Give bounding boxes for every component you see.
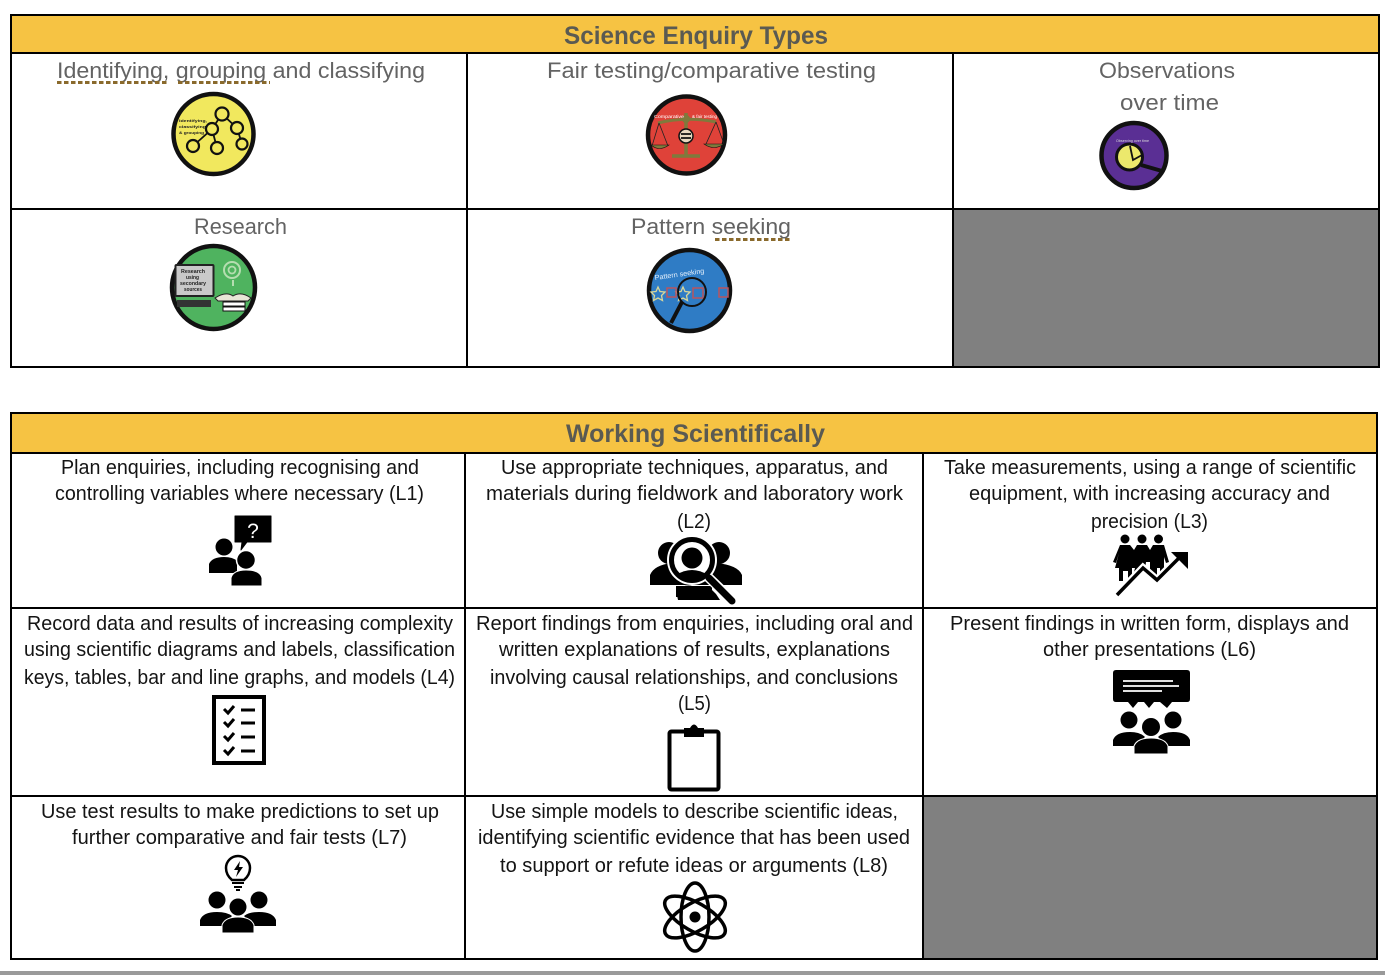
icon: yellow classifying badge: Identifying, [179, 118, 207, 123]
icon: green research badge [172, 246, 255, 329]
heading: Science Enquiry Types: Science Enquiry Types [564, 22, 828, 50]
heading: Working Scientifically: Working Scientifically [566, 420, 825, 448]
panel: Science Enquiry Types [11, 15, 1379, 367]
cell: L1: controlling variables where necessary (L1) [55, 483, 424, 505]
cell: L3 [944, 457, 1356, 595]
icon: red balance scales badge: Comparative [654, 114, 685, 119]
icon: people with question bubble [209, 516, 271, 586]
cell: L3: equipment, with increasing accuracy and [969, 483, 1330, 505]
cell: L1: Plan enquiries, including recognising and [61, 457, 419, 479]
cell: L2: Use appropriate techniques, apparatus, and [501, 457, 888, 479]
icon: yellow classifying badge: classifying [179, 124, 207, 129]
cell: L4: Record data and results of increasing complexity [27, 613, 453, 635]
icon: yellow classifying badge [174, 94, 254, 174]
icon: blue pattern seeking badge: Pattern seeking [654, 268, 705, 282]
icon: atom [659, 883, 731, 951]
cell: L5: written explanations of results, explanations [498, 639, 890, 661]
icon: red balance scales badge [648, 96, 725, 174]
cell: L5: (L5) [678, 693, 711, 715]
cell: Pattern seeking: Pattern seeking [631, 214, 791, 239]
icon: checklist [214, 697, 264, 763]
empty grey cell [953, 209, 1379, 367]
cell: L6 [950, 613, 1349, 754]
cell: Identifying, grouping and classifying [57, 58, 425, 174]
cell: Pattern seeking [631, 214, 792, 331]
cell: L8 [478, 801, 910, 951]
icon: people with rising arrow [1113, 534, 1188, 595]
cell: L2 [486, 457, 904, 601]
icon: yellow classifying badge: & grouping [179, 130, 205, 135]
cell: L6: other presentations (L6) [1043, 639, 1256, 661]
cell: L3: Take measurements, using a range of scientific [944, 457, 1356, 479]
cell: L4 [24, 613, 455, 763]
cell: L3: precision (L3) [1091, 511, 1208, 533]
cell: Observations over time: over time [1120, 90, 1219, 115]
cell: L7: Use test results to make predictions to set up [41, 801, 439, 823]
cell: L8: Use simple models to describe scientific ideas, [491, 801, 898, 823]
panel: Working Scientifically [11, 413, 1377, 959]
heading: Science Enquiry Types [11, 15, 1379, 53]
cell: L7 [41, 801, 439, 933]
heading: Working Scientifically [11, 413, 1377, 453]
cell: L1 [55, 457, 424, 586]
icon: audience with speech bubble [1113, 670, 1190, 754]
cell: L2: materials during fieldwork and laboratory work [486, 483, 904, 505]
icon: audience with light bulb [200, 856, 276, 933]
icon: magnifier over people [650, 535, 742, 601]
icon: purple observation badge: Observing over time [1116, 138, 1150, 143]
cell: Research [172, 214, 287, 329]
cell: L5 [476, 613, 913, 790]
cell: Observations over time [1099, 58, 1235, 188]
cell: Fair testing/comparative testing: Fair testing/comparative testing [547, 58, 876, 83]
icon: clipboard [670, 724, 718, 790]
cell: L8: to support or refute ideas or arguments (L8) [500, 855, 888, 877]
cell: Observations over time: Observations [1099, 58, 1235, 83]
cell: L4: keys, tables, bar and line graphs, and models (L4) [24, 667, 455, 689]
icon: blue pattern seeking badge [649, 250, 730, 331]
icon: green research badge: Research [181, 269, 205, 275]
empty grey cell [923, 796, 1377, 959]
cell: L8: identifying scientific evidence that has been used [478, 827, 910, 849]
cell: L7: further comparative and fair tests (L7) [72, 827, 407, 849]
icon: red balance scales badge: & fair testing [692, 114, 717, 119]
cell: L2: (L2) [677, 511, 711, 533]
cell: Research: Research [194, 214, 287, 239]
icon: people with question bubble: ? [247, 520, 259, 543]
cell: L5: involving causal relationships, and conclusions [490, 667, 898, 689]
cell: Fair testing/comparative testing [547, 58, 876, 174]
cell: Identifying, grouping and classifying: Identifying, grouping and classifying [57, 58, 425, 83]
cell: L4: using scientific diagrams and labels, classification [24, 639, 455, 661]
cell: L6: Present findings in written form, displays and [950, 613, 1349, 635]
icon: green research badge: secondary [180, 281, 206, 287]
icon: green research badge: using [186, 275, 199, 281]
cell: L5: Report findings from enquiries, including oral and [476, 613, 913, 635]
icon: green research badge: sources [184, 287, 202, 293]
